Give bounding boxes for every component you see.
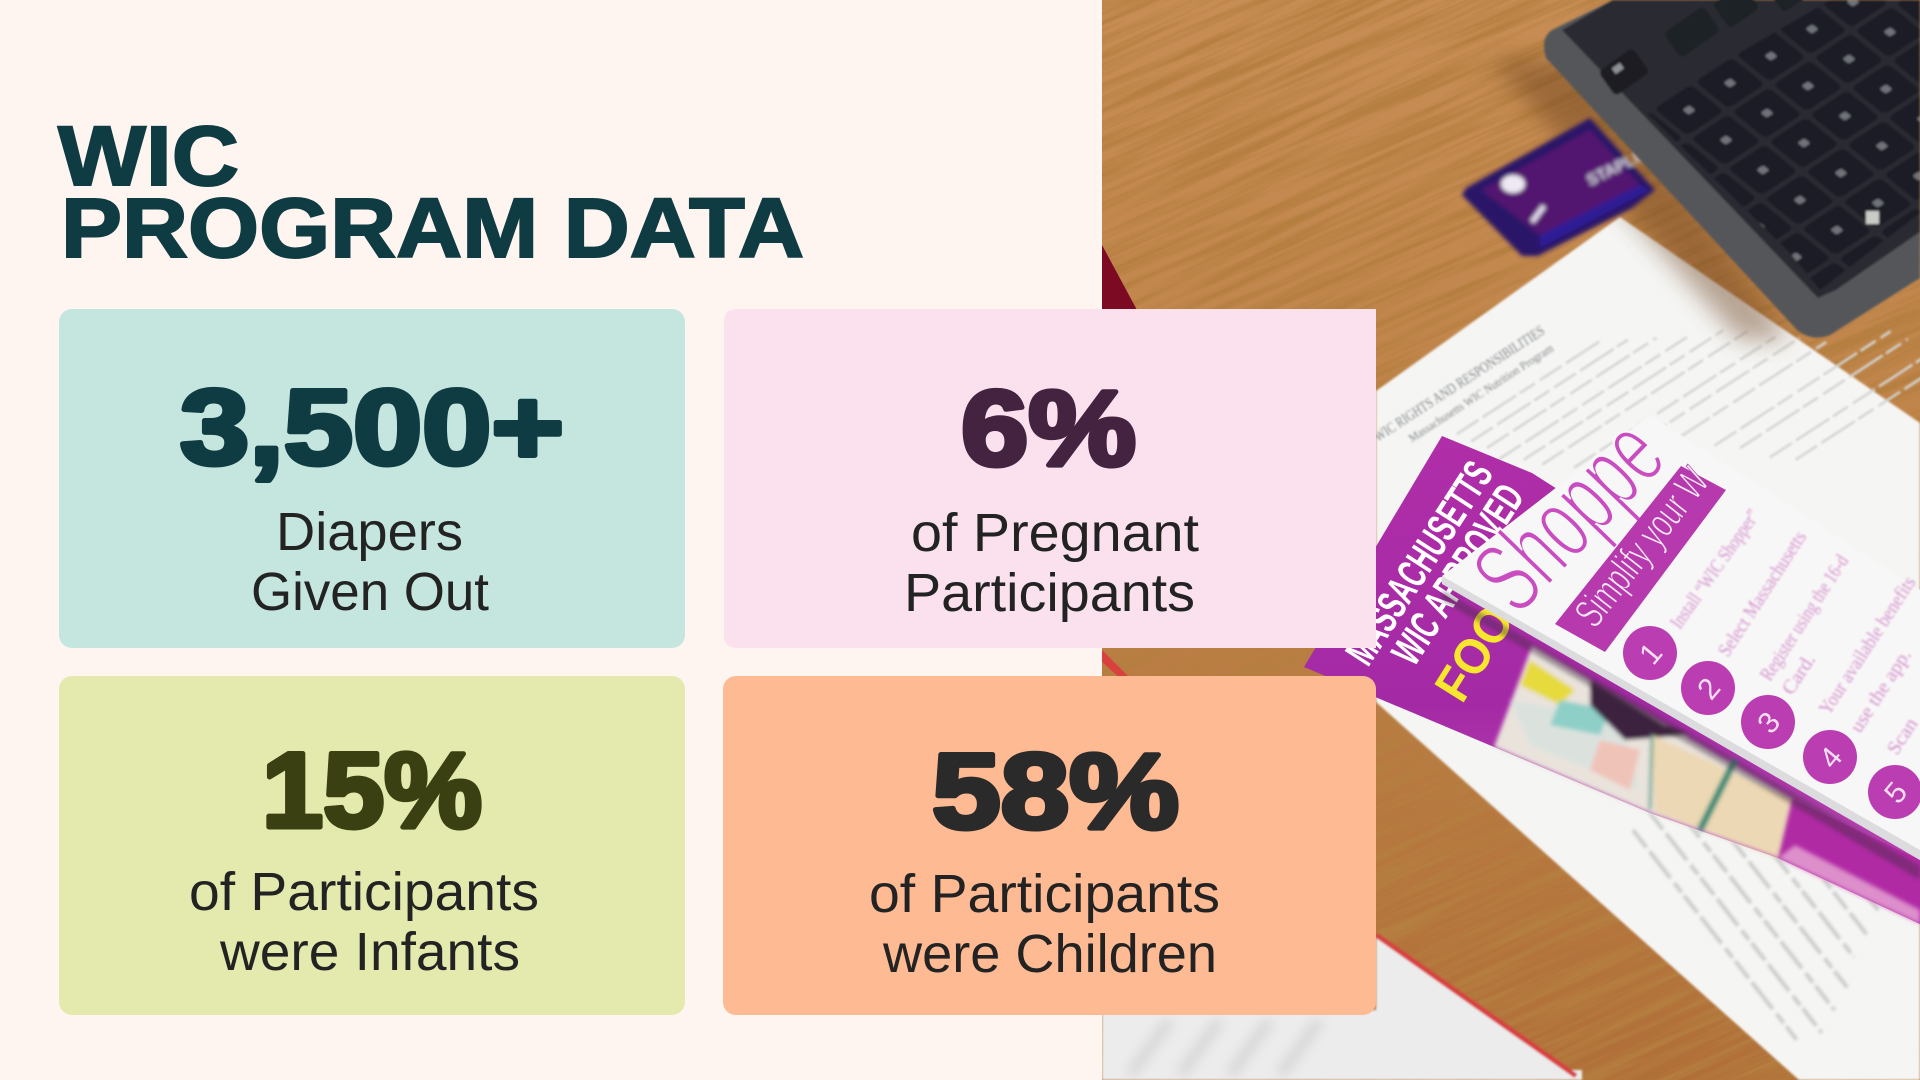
wooden desk surface [1102, 0, 1920, 1080]
step instructions: use the app. [1846, 645, 1916, 737]
big number: 58% [932, 731, 1179, 851]
brochure title text [1344, 461, 1522, 702]
big number: 6% [961, 368, 1136, 488]
main white document [1371, 184, 1920, 1080]
brochure title text: WIC APPROVED [1382, 475, 1533, 673]
label [189, 862, 539, 982]
photo: WIC brochures on a wooden desk with a keyboard [1102, 0, 1920, 1080]
step instructions: Register using the 16-d [1756, 551, 1853, 685]
keyboard keys [1647, 0, 1920, 290]
numbered steps: 4 [1813, 741, 1849, 775]
label: were Infants [219, 922, 520, 982]
Shoppe heading: Shoppe [1451, 397, 1686, 634]
keyboard [1544, 0, 1920, 338]
label: of Participants [189, 862, 539, 922]
step instructions: Card. [1778, 650, 1820, 699]
red folder edge, middle [1102, 650, 1128, 676]
document body lines, bottom [1631, 813, 1880, 1041]
document body lines, top [1456, 329, 1920, 468]
label [904, 503, 1199, 623]
label: Diapers [276, 502, 463, 562]
windows key legend [1866, 211, 1879, 224]
purple WIC food brochure [1304, 436, 1920, 924]
label: were Children [882, 924, 1217, 984]
title: PROGRAM DATA [61, 181, 804, 275]
card background [723, 676, 1376, 1015]
label [869, 864, 1220, 984]
USB label: STAPLES [1584, 142, 1657, 190]
panel: pregnant participants [724, 309, 1376, 648]
red folder corner, top [1102, 245, 1137, 310]
keyboard top plate [1562, 0, 1920, 298]
bottom paper with red edge [1102, 935, 1582, 1080]
label: Participants [904, 563, 1195, 623]
numbered steps: 2 [1691, 672, 1727, 706]
numbered steps: 3 [1751, 706, 1787, 740]
numbered steps [1623, 626, 1920, 819]
banner [1555, 466, 1726, 652]
title [58, 109, 804, 275]
numbered steps: 5 [1878, 776, 1914, 810]
banner text: Simplify your W [1565, 458, 1718, 636]
big number: 3,500+ [180, 367, 564, 487]
card background [724, 309, 1376, 648]
brochure lower purple band [1778, 799, 1920, 924]
brochure photo strip [1494, 646, 1792, 858]
panel: diapers given out [59, 309, 685, 648]
USB device [1462, 118, 1657, 256]
document heading: WIC RIGHTS AND RESPONSIBILITIES [1371, 323, 1548, 445]
brochure shadow [1442, 590, 1920, 880]
step instructions [1666, 506, 1920, 759]
label: Given Out [251, 562, 489, 622]
panel: children [723, 676, 1376, 1015]
escape key [1600, 50, 1648, 95]
brochure fold edge [1442, 576, 1920, 860]
WIC Shopper brochure [1442, 397, 1920, 880]
numbered steps: 1 [1633, 637, 1669, 671]
step instructions: Install “WIC Shopper” [1666, 506, 1764, 633]
card background [59, 676, 685, 1015]
title: WIC [58, 109, 239, 203]
brochure cover [1304, 436, 1920, 924]
panel: infants [59, 676, 685, 1015]
shadow under keyboard [1490, 60, 1790, 340]
function keys [1666, 0, 1804, 55]
brochure title text: MASSACHUSETTS [1336, 453, 1502, 673]
brochure title text: FOOD [1424, 567, 1543, 711]
big number: 15% [262, 730, 482, 850]
keyboard body [1544, 0, 1920, 338]
card background [59, 309, 685, 648]
label [251, 502, 489, 622]
step instructions: Select Massachusetts [1714, 527, 1811, 661]
brochure page [1442, 415, 1920, 860]
document heading: Massachusetts WIC Nutrition Program [1406, 341, 1557, 445]
label: of Participants [869, 864, 1220, 924]
label: of Pregnant [911, 503, 1199, 563]
